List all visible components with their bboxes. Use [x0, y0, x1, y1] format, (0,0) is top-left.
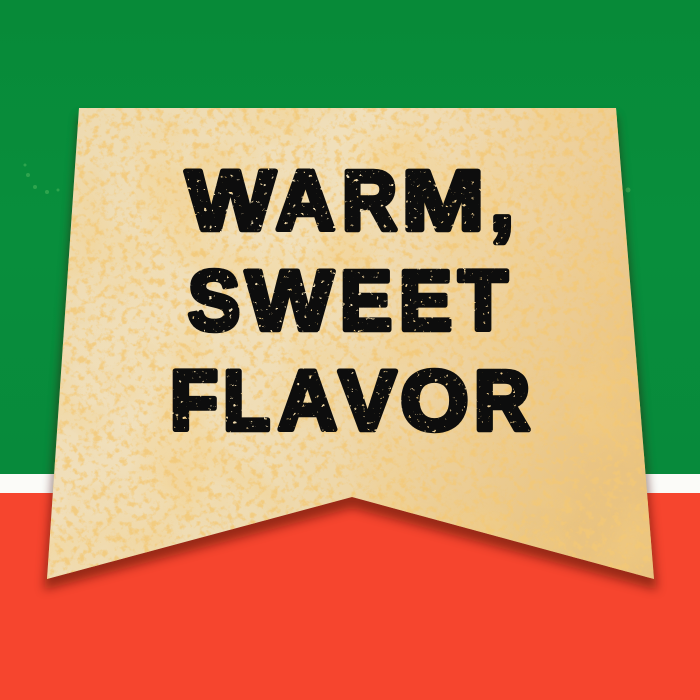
headline line 1: ,: [490, 154, 514, 248]
headline line 2: T: [458, 254, 508, 348]
headline line 1: W: [186, 154, 276, 248]
headline line 2: S: [188, 254, 240, 348]
headline line 2: W: [246, 254, 334, 348]
headline line 3: A: [278, 354, 337, 448]
headline line 3: L: [223, 354, 270, 448]
white stripe: [0, 474, 700, 494]
parchment banner: [40, 100, 660, 590]
banner shadow: [44, 116, 657, 590]
headline line 1: R: [342, 154, 397, 248]
headline line 3: F: [170, 354, 218, 448]
headline line 1: A: [276, 154, 335, 248]
green background band: [0, 0, 700, 474]
headline line 3: V: [339, 354, 396, 448]
red background band: [0, 493, 700, 700]
headline line 3: R: [474, 354, 530, 448]
headline line 2: E: [340, 254, 392, 348]
headline line 1: M: [402, 154, 484, 248]
headline: [170, 154, 530, 448]
headline line 3: O: [400, 354, 468, 448]
headline line 2: E: [399, 254, 452, 348]
